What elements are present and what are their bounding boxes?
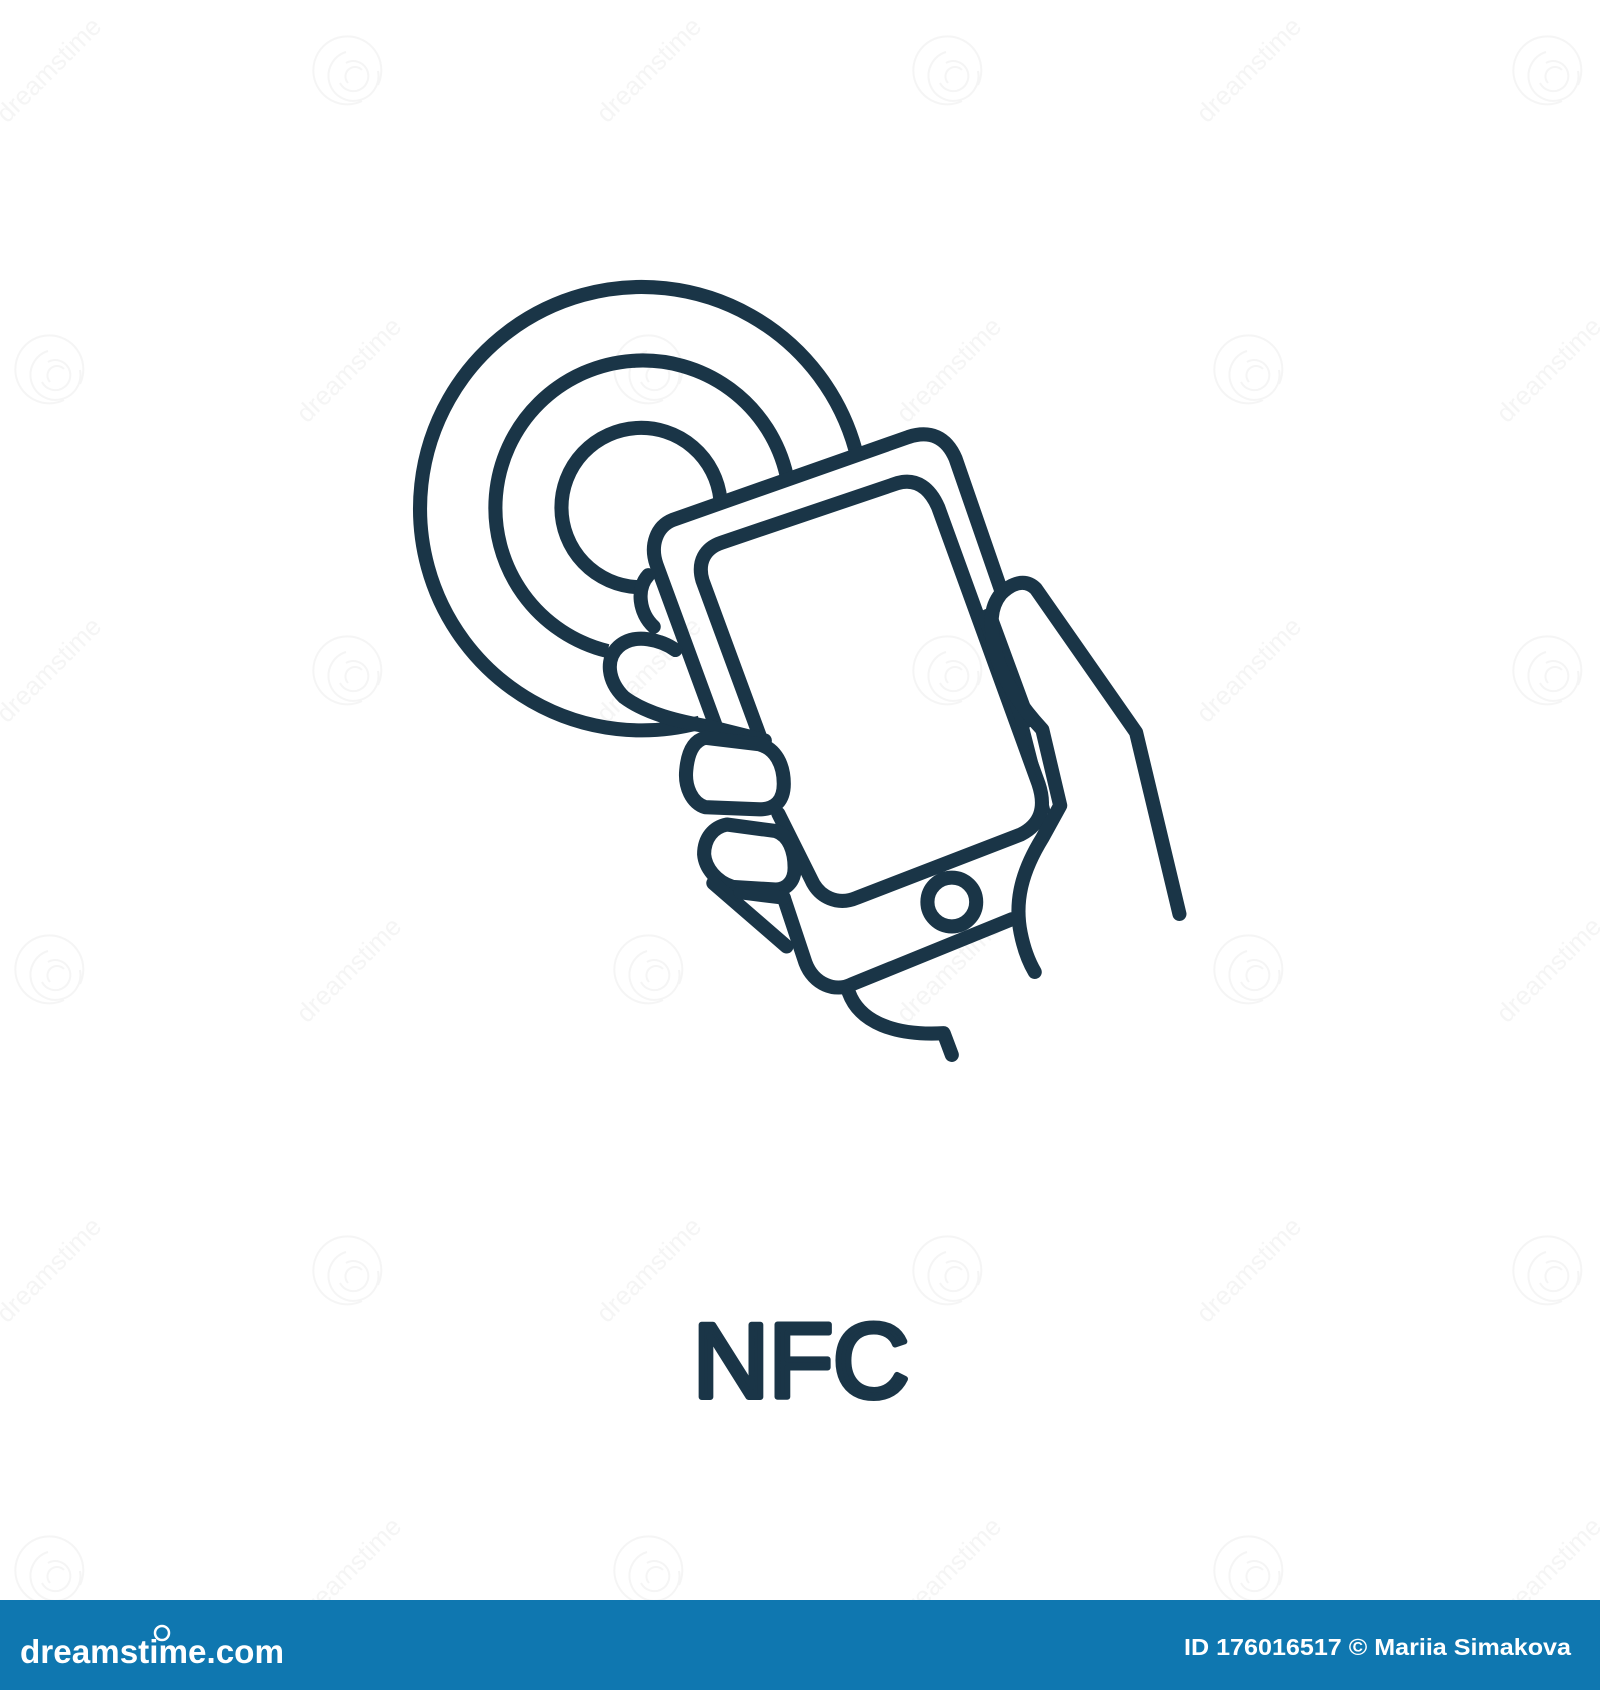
NFC infographic canvas: dreamstime: [590, 11, 707, 128]
icon: hand and fingers: [610, 575, 1179, 1055]
NFC infographic canvas: dreamstime: [290, 311, 407, 428]
logo: dreamstime.com: dreamstime.com: [20, 1633, 284, 1670]
NFC infographic canvas: dreamstime: [890, 1511, 1007, 1628]
footer band: [0, 1600, 1600, 1690]
title: NFC: NFC: [693, 1303, 909, 1420]
NFC infographic canvas: dreamstime: [890, 311, 1007, 428]
NFC infographic canvas: dreamstime: [290, 1511, 407, 1628]
NFC infographic canvas: dreamstime: [1190, 611, 1307, 728]
NFC infographic canvas: dreamstime: [1190, 11, 1307, 128]
icon: phone body: [654, 434, 1048, 988]
icon: hand holding phone with NFC signal rings: [420, 287, 1179, 1055]
NFC infographic canvas: dreamstime: [290, 911, 407, 1028]
icon: NFC signal rings: [420, 287, 855, 730]
NFC infographic canvas: dreamstime: [590, 611, 707, 728]
NFC infographic canvas: dreamstime: [1190, 1211, 1307, 1328]
NFC infographic canvas: dreamstime: [890, 911, 1007, 1028]
NFC infographic canvas: dreamstime: [590, 1211, 707, 1328]
image credit: ID 176016517 © Mariia Simakova: [1184, 1634, 1571, 1660]
